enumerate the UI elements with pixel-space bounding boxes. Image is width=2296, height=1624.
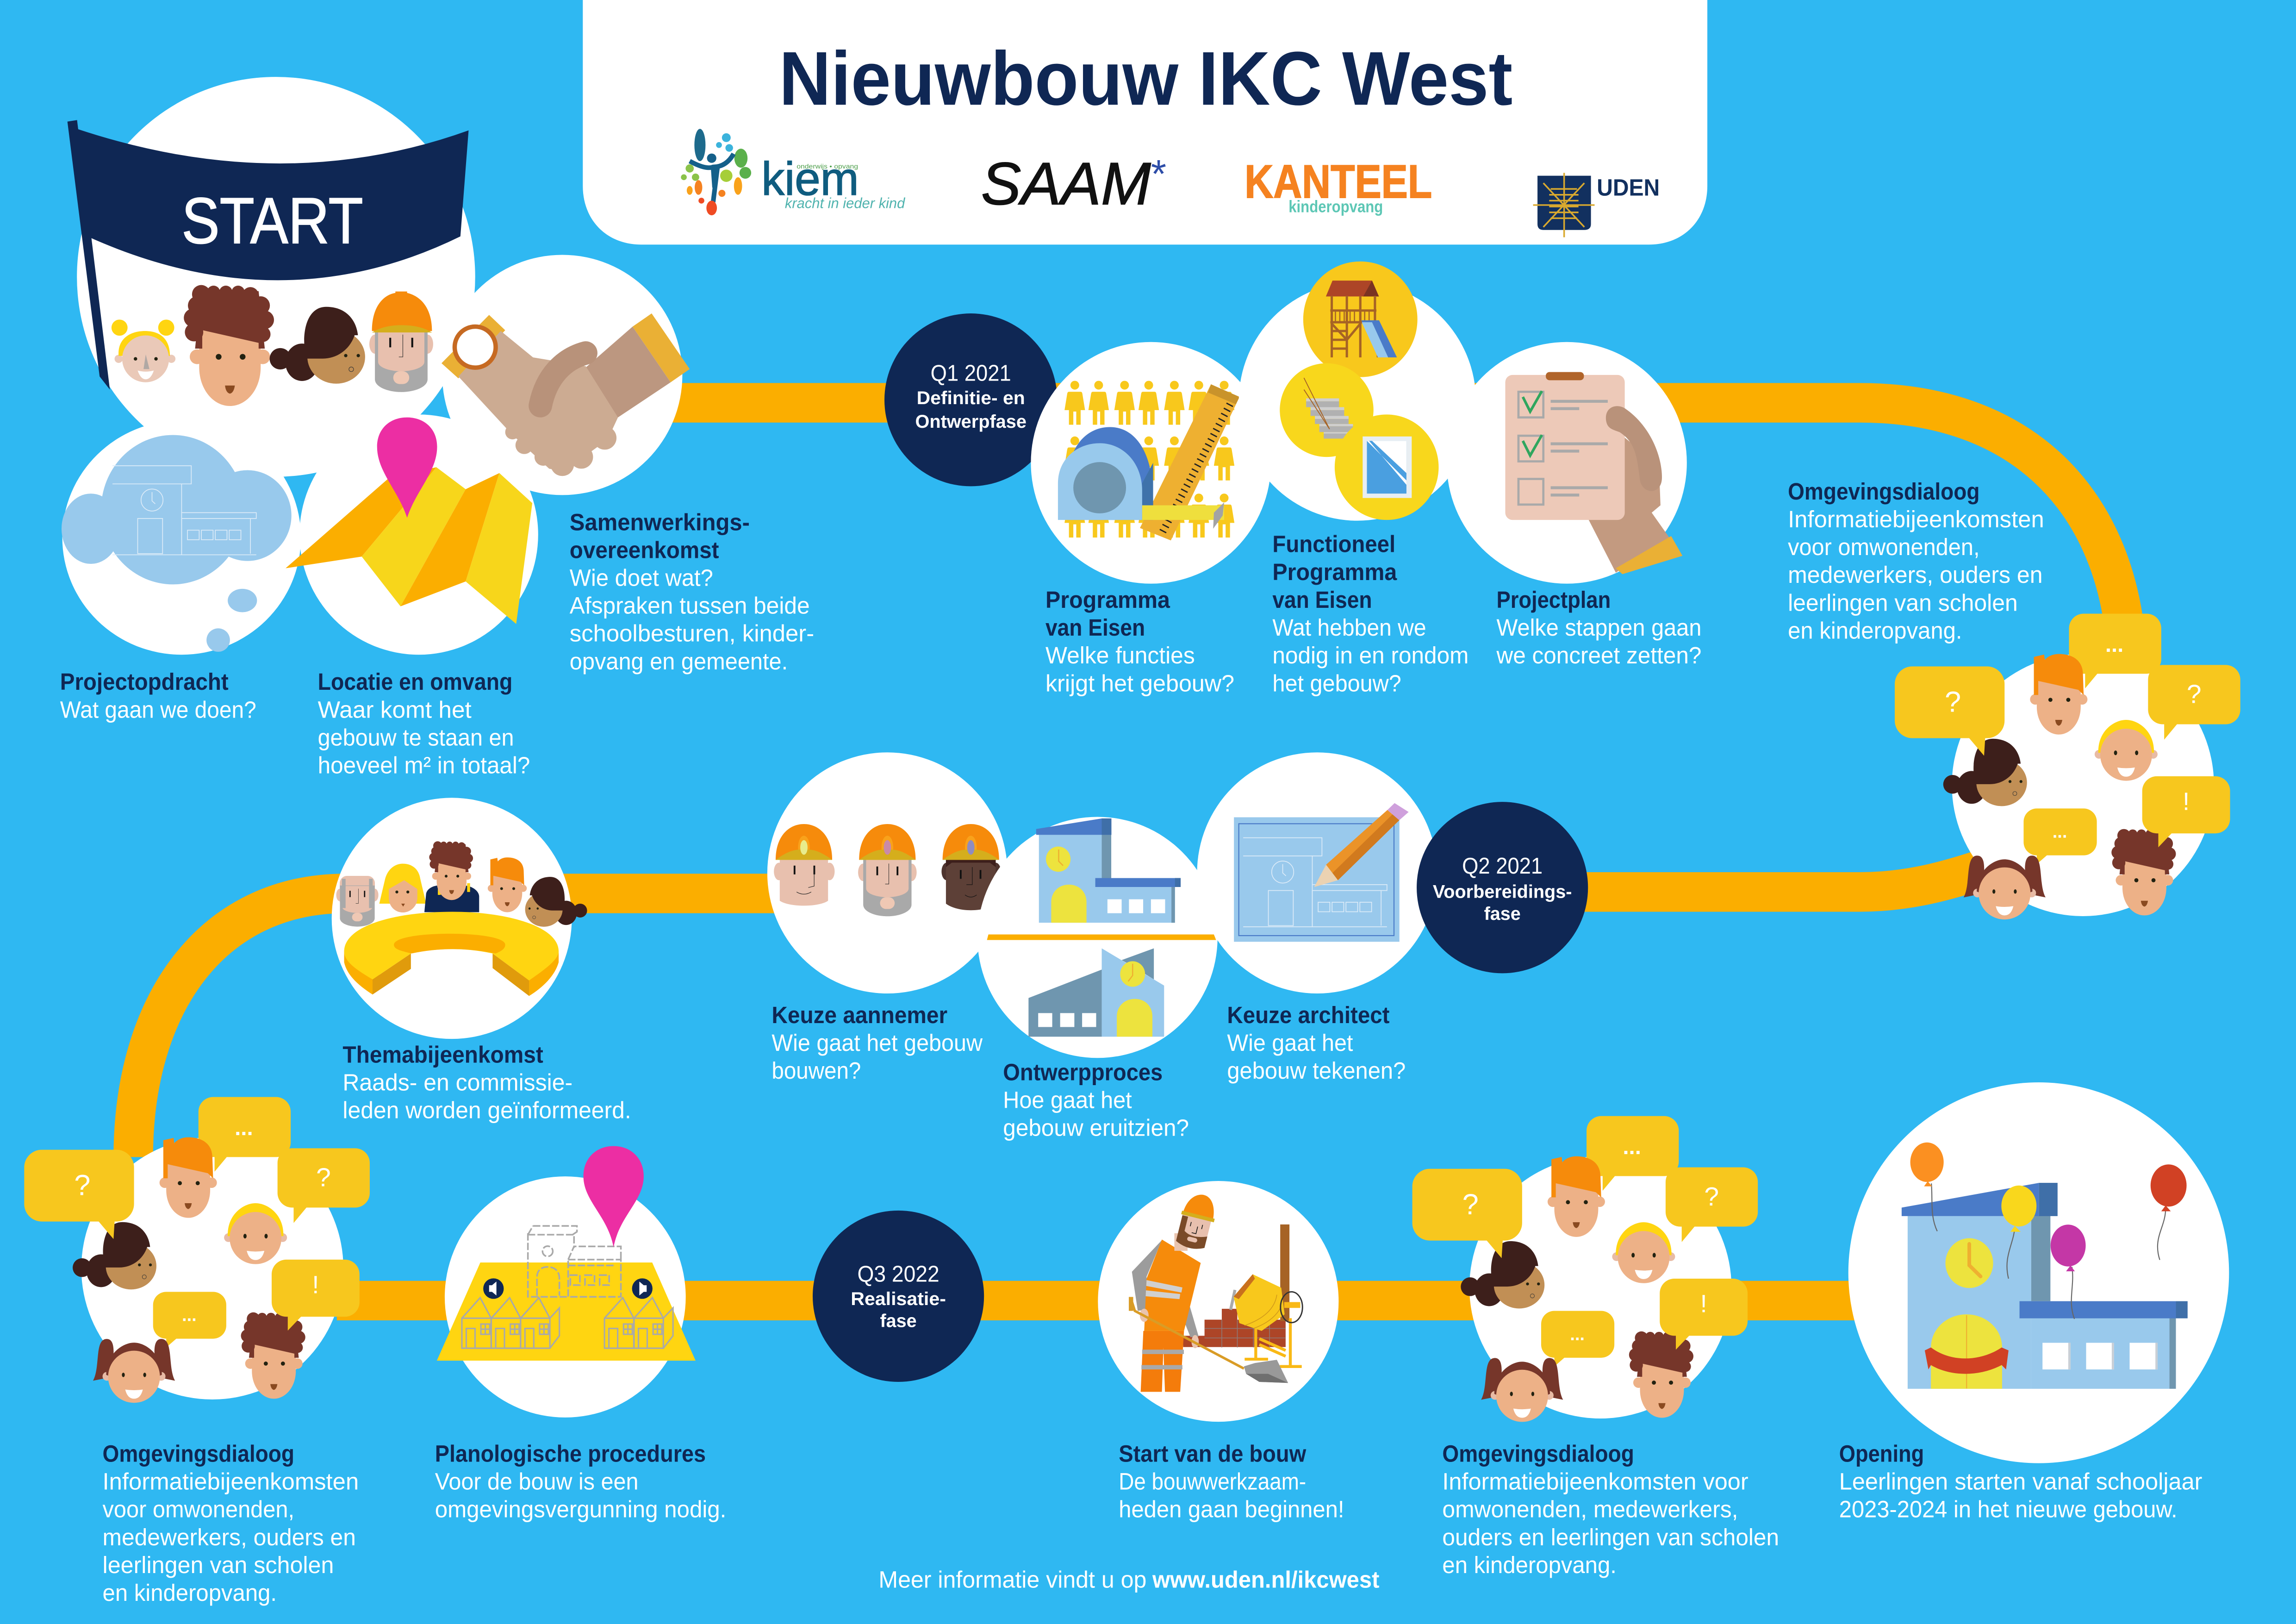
bubble marks: ?	[1704, 1182, 1719, 1212]
logo: Uden: UDEN	[1597, 174, 1660, 200]
thumb	[1606, 406, 1662, 491]
right cuff	[633, 313, 690, 382]
text: omgevingsdialoog midden: Informatiebijeenkomsten voor	[1442, 1468, 1748, 1495]
panel: keuze architect	[1197, 752, 1437, 993]
text: ontwerpproces: Ontwerpproces	[1003, 1059, 1163, 1085]
text: samenwerkingsovereenkomst: Wie doet wat?	[570, 565, 713, 591]
panel: keuze aannemer	[767, 752, 1008, 993]
text: programma van eisen: Welke functies	[1045, 642, 1195, 668]
face: girl with buns	[112, 319, 175, 382]
text: locatie en omvang: Locatie en omvang	[318, 668, 512, 695]
panel: projectplan	[1447, 342, 1687, 584]
text: omgevingsdialoog rechts: en kinderopvang.	[1788, 617, 1962, 643]
Q1 badge: Definitie- en	[917, 388, 1025, 408]
text: start van de bouw: Start van de bouw	[1119, 1440, 1307, 1467]
bubble marks	[1462, 1135, 1719, 1344]
text: start van de bouw: De bouwwerkzaam-	[1119, 1468, 1306, 1495]
text: planologische procedures	[435, 1440, 726, 1523]
text: opening: Opening	[1839, 1440, 1924, 1467]
text: locatie en omvang: Waar komt het	[318, 696, 472, 723]
text: locatie en omvang: gebouw te staan en	[318, 724, 514, 750]
houses right	[604, 1298, 673, 1348]
text: programma van eisen: Programma	[1045, 587, 1170, 613]
faces and bubbles	[24, 1097, 370, 1403]
ribbon	[1925, 1348, 2009, 1374]
text: samenwerkingsovereenkomst: Afspraken tussen beide	[570, 593, 810, 619]
logo: Kanteel: kinderopvang	[1288, 197, 1383, 216]
hand arm	[1589, 432, 1669, 573]
text: omgevingsdialoog rechts: medewerkers, ouders en	[1788, 562, 2043, 588]
text: omgevingsdialoog midden: Omgevingsdialoog	[1442, 1440, 1634, 1467]
text: functioneel programma van eisen: Functioneel	[1272, 531, 1395, 557]
ruler	[1140, 384, 1239, 540]
panel: start van de bouw	[1098, 1181, 1338, 1422]
text: themabijeenkomst	[342, 1041, 631, 1124]
bubble marks: ?	[2187, 680, 2202, 709]
text: start van de bouw	[1119, 1440, 1344, 1523]
Q3 badge: fase	[880, 1311, 917, 1331]
text: projectplan: Welke stappen gaan	[1496, 614, 1701, 641]
panel: projectopdracht	[62, 420, 301, 655]
text: start van de bouw: heden gaan beginnen!	[1119, 1496, 1344, 1523]
woman with blonde hair	[380, 864, 426, 912]
text: samenwerkingsovereenkomst: schoolbesturen, kinder-	[570, 620, 814, 647]
divider	[987, 934, 1216, 940]
text: planologische procedures: Planologische procedures	[435, 1440, 706, 1467]
text: omgevingsdialoog rechts: leerlingen van scholen	[1788, 589, 2018, 616]
text: keuze architect: Wie gaat het	[1227, 1030, 1353, 1056]
text: functioneel programma van eisen: het gebouw?	[1272, 670, 1401, 696]
post	[1280, 1224, 1289, 1321]
Q2 badge: Q2 2021	[1462, 854, 1543, 879]
text: programma van eisen: krijgt het gebouw?	[1045, 670, 1234, 696]
Q3 badge	[813, 1211, 984, 1382]
Q2 badge	[1417, 802, 1588, 973]
panel: ontwerpproces	[977, 817, 1218, 1058]
watch	[454, 327, 496, 368]
faces and bubbles	[1895, 614, 2240, 919]
man in navy suit	[424, 841, 479, 912]
clock	[1945, 1238, 1993, 1288]
flag banner	[77, 129, 469, 280]
right arm	[575, 327, 671, 418]
flag label: START	[181, 184, 363, 257]
text: omgevingsdialoog midden: en kinderopvang.	[1442, 1552, 1617, 1578]
bubble marks: ?	[1462, 1188, 1479, 1221]
text: projectopdracht: Projectopdracht	[60, 668, 229, 695]
text: omgevingsdialoog links	[103, 1440, 359, 1606]
map pin	[584, 1146, 644, 1247]
bubble marks: ...	[2053, 823, 2067, 842]
ghost building	[528, 1226, 621, 1297]
bubble marks: ...	[182, 1306, 197, 1325]
text: planologische procedures: omgevingsvergunning nodig.	[435, 1496, 726, 1523]
footer link: Meer informatie vindt u op	[878, 1567, 1146, 1593]
face: bearded builder	[369, 292, 433, 392]
text: keuze aannemer: Keuze aannemer	[772, 1002, 947, 1028]
bubble marks: !	[1700, 1290, 1707, 1318]
Q3 badge: Realisatie-	[851, 1289, 946, 1309]
text: keuze architect: Keuze architect	[1227, 1002, 1390, 1028]
text: functioneel programma van eisen: Wat hebben we	[1272, 614, 1426, 641]
concrete mixer	[1231, 1274, 1302, 1367]
thought cloud	[62, 435, 292, 652]
logo: SAAM: SAAM	[981, 150, 1151, 217]
text: themabijeenkomst: Raads- en commissie-	[342, 1069, 572, 1095]
text: projectplan: Projectplan	[1496, 587, 1611, 613]
circle: stairs	[1280, 363, 1374, 457]
text: omgevingsdialoog links: medewerkers, ouders en	[103, 1524, 356, 1550]
footer link	[878, 1567, 1380, 1593]
panel: themabijeenkomst	[332, 798, 587, 1039]
text: themabijeenkomst: Themabijeenkomst	[342, 1041, 543, 1068]
logo: SAAM: *	[1151, 152, 1166, 196]
design option top	[1036, 818, 1181, 923]
balloons	[1910, 1143, 2187, 1319]
panel: functioneel programma	[1239, 262, 1476, 521]
logo: kiem: kiem	[761, 153, 859, 205]
text: opening: Leerlingen starten vanaf schooljaar	[1839, 1468, 2203, 1495]
folded map	[286, 467, 532, 624]
text: programma van eisen: van Eisen	[1045, 614, 1145, 641]
logo: Uden	[1533, 173, 1660, 237]
face: curly man	[184, 285, 274, 406]
checklist	[1518, 391, 1608, 505]
flag pole	[68, 120, 110, 390]
sound icon right	[632, 1278, 653, 1299]
man with grey beard	[336, 876, 379, 927]
builder one	[774, 824, 834, 906]
bubble marks: ...	[1623, 1135, 1641, 1159]
text: omgevingsdialoog midden: omwonenden, medewerkers,	[1442, 1496, 1738, 1523]
text: omgevingsdialoog rechts: Informatiebijeenkomsten	[1788, 506, 2044, 532]
text: samenwerkingsovereenkomst	[570, 509, 814, 675]
text: ontwerpproces	[1003, 1059, 1189, 1141]
left arm and fingers	[458, 331, 618, 476]
panel: programma van eisen	[1031, 342, 1271, 584]
Q1 badge: Q1 2021	[931, 361, 1011, 386]
text: keuze aannemer: Wie gaat het gebouw	[772, 1030, 983, 1056]
logo: kiem	[681, 129, 906, 215]
circle: window	[1335, 414, 1439, 520]
left cuff	[442, 315, 505, 378]
text: keuze aannemer	[772, 1002, 983, 1084]
text: projectplan	[1496, 587, 1701, 668]
bubble marks: !	[2183, 788, 2190, 816]
text: functioneel programma van eisen: van Eisen	[1272, 587, 1372, 613]
shovel	[1131, 1297, 1288, 1383]
text: functioneel programma van eisen	[1272, 531, 1468, 696]
bubble marks: !	[312, 1271, 319, 1299]
thumb	[541, 353, 586, 406]
bubble marks: ...	[235, 1116, 253, 1140]
text: samenwerkingsovereenkomst: opvang en gemeente.	[570, 648, 788, 675]
text: locatie en omvang	[318, 668, 530, 778]
boy with orange hair	[488, 857, 527, 912]
text: projectopdracht: Wat gaan we doen?	[60, 696, 256, 723]
Q2 badge: Voorbereidings-	[1433, 881, 1572, 902]
text: omgevingsdialoog links: en kinderopvang.	[103, 1580, 277, 1606]
clipboard	[1505, 375, 1625, 520]
bubble marks: ?	[316, 1163, 331, 1193]
builder three	[941, 824, 1001, 910]
panel: dialoog midden	[1412, 1116, 1758, 1422]
logo: kiem: onderwijs • opvang	[796, 163, 858, 170]
text: samenwerkingsovereenkomst: Samenwerkings-	[570, 509, 750, 535]
new school building	[1902, 1183, 2188, 1389]
cuff	[1616, 536, 1682, 574]
pencil	[1314, 803, 1409, 887]
clip	[1546, 372, 1584, 380]
text: themabijeenkomst: leden worden geïnformeerd.	[342, 1097, 631, 1124]
text: ontwerpproces: gebouw eruitzien?	[1003, 1115, 1189, 1141]
header panel	[583, 0, 1707, 244]
worker	[1132, 1191, 1220, 1392]
panel: dialoog linksonder	[24, 1097, 370, 1403]
text: omgevingsdialoog rechts: Omgevingsdialoog	[1788, 478, 1980, 505]
text: functioneel programma van eisen: Programma	[1272, 559, 1397, 585]
text: projectplan: we concreet zetten?	[1496, 642, 1701, 668]
bubble marks: ...	[2105, 632, 2123, 657]
Q1 badge	[884, 313, 1057, 486]
faces and bubbles	[1412, 1116, 1758, 1422]
telephone handset	[344, 912, 559, 996]
title: Nieuwbouw IKC West	[779, 36, 1512, 121]
text: omgevingsdialoog links: leerlingen van scholen	[103, 1552, 334, 1578]
footer link: www.uden.nl/ikcwest	[1152, 1567, 1380, 1593]
text: samenwerkingsovereenkomst: overeenkomst	[570, 537, 719, 563]
brick wall	[1183, 1309, 1286, 1348]
map pin	[377, 418, 437, 518]
route: orange path	[133, 403, 2125, 1300]
panel: locatie	[286, 414, 538, 655]
text: omgevingsdialoog rechts	[1788, 478, 2044, 643]
bubble marks	[74, 1116, 331, 1325]
bubble marks: ...	[1570, 1325, 1585, 1344]
text: keuze architect	[1227, 1002, 1406, 1084]
bubble marks: ?	[74, 1169, 90, 1202]
text: omgevingsdialoog links: Informatiebijeenkomsten	[103, 1468, 359, 1495]
text: opening: 2023-2024 in het nieuwe gebouw.	[1839, 1496, 2178, 1523]
design option bottom	[1028, 949, 1164, 1037]
text: omgevingsdialoog rechts: voor omwonenden,	[1788, 534, 1980, 560]
panel: start	[68, 77, 475, 477]
text: omgevingsdialoog links: voor omwonenden,	[103, 1496, 294, 1523]
sound icon left	[483, 1278, 504, 1299]
logo: Kanteel: KANTEEL	[1244, 156, 1432, 208]
circle: playground	[1303, 262, 1418, 377]
text: keuze architect: gebouw tekenen?	[1227, 1057, 1406, 1084]
text: omgevingsdialoog links: Omgevingsdialoog	[103, 1440, 294, 1467]
Q3 badge: Q3 2022	[857, 1262, 940, 1287]
text: opening	[1839, 1440, 2203, 1523]
Q2 badge: fase	[1484, 904, 1521, 924]
builder two	[858, 824, 917, 916]
Q1 badge: Ontwerpfase	[915, 412, 1027, 432]
panel: planologische procedures	[437, 1146, 696, 1418]
people rows	[1064, 381, 1234, 537]
tape measure	[1058, 427, 1224, 529]
door	[1931, 1314, 2002, 1389]
text: locatie en omvang: hoeveel m² in totaal?	[318, 752, 530, 778]
text: keuze aannemer: bouwen?	[772, 1057, 861, 1084]
text: planologische procedures: Voor de bouw is een	[435, 1468, 639, 1495]
building sketch	[112, 466, 256, 555]
panel: dialoog rechtsboven	[1895, 614, 2240, 919]
blueprint	[1234, 817, 1400, 942]
panel: handshake	[442, 255, 690, 495]
woman with bun	[525, 877, 587, 927]
logo: kiem: kracht in ieder kind	[785, 194, 906, 211]
panel: opening	[1848, 1082, 2229, 1463]
text: omgevingsdialoog midden: ouders en leerlingen van scholen	[1442, 1524, 1779, 1550]
houses left	[462, 1298, 560, 1348]
bubble marks: ?	[1945, 686, 1961, 718]
text: ontwerpproces: Hoe gaat het	[1003, 1087, 1132, 1113]
bubble marks	[1945, 632, 2202, 842]
text: omgevingsdialoog midden	[1442, 1440, 1779, 1578]
site plate	[437, 1262, 696, 1361]
text: programma van eisen	[1045, 587, 1234, 696]
face: dark-haired girl	[270, 307, 365, 384]
text: projectopdracht	[60, 668, 256, 723]
text: functioneel programma van eisen: nodig in en rondom	[1272, 642, 1468, 668]
